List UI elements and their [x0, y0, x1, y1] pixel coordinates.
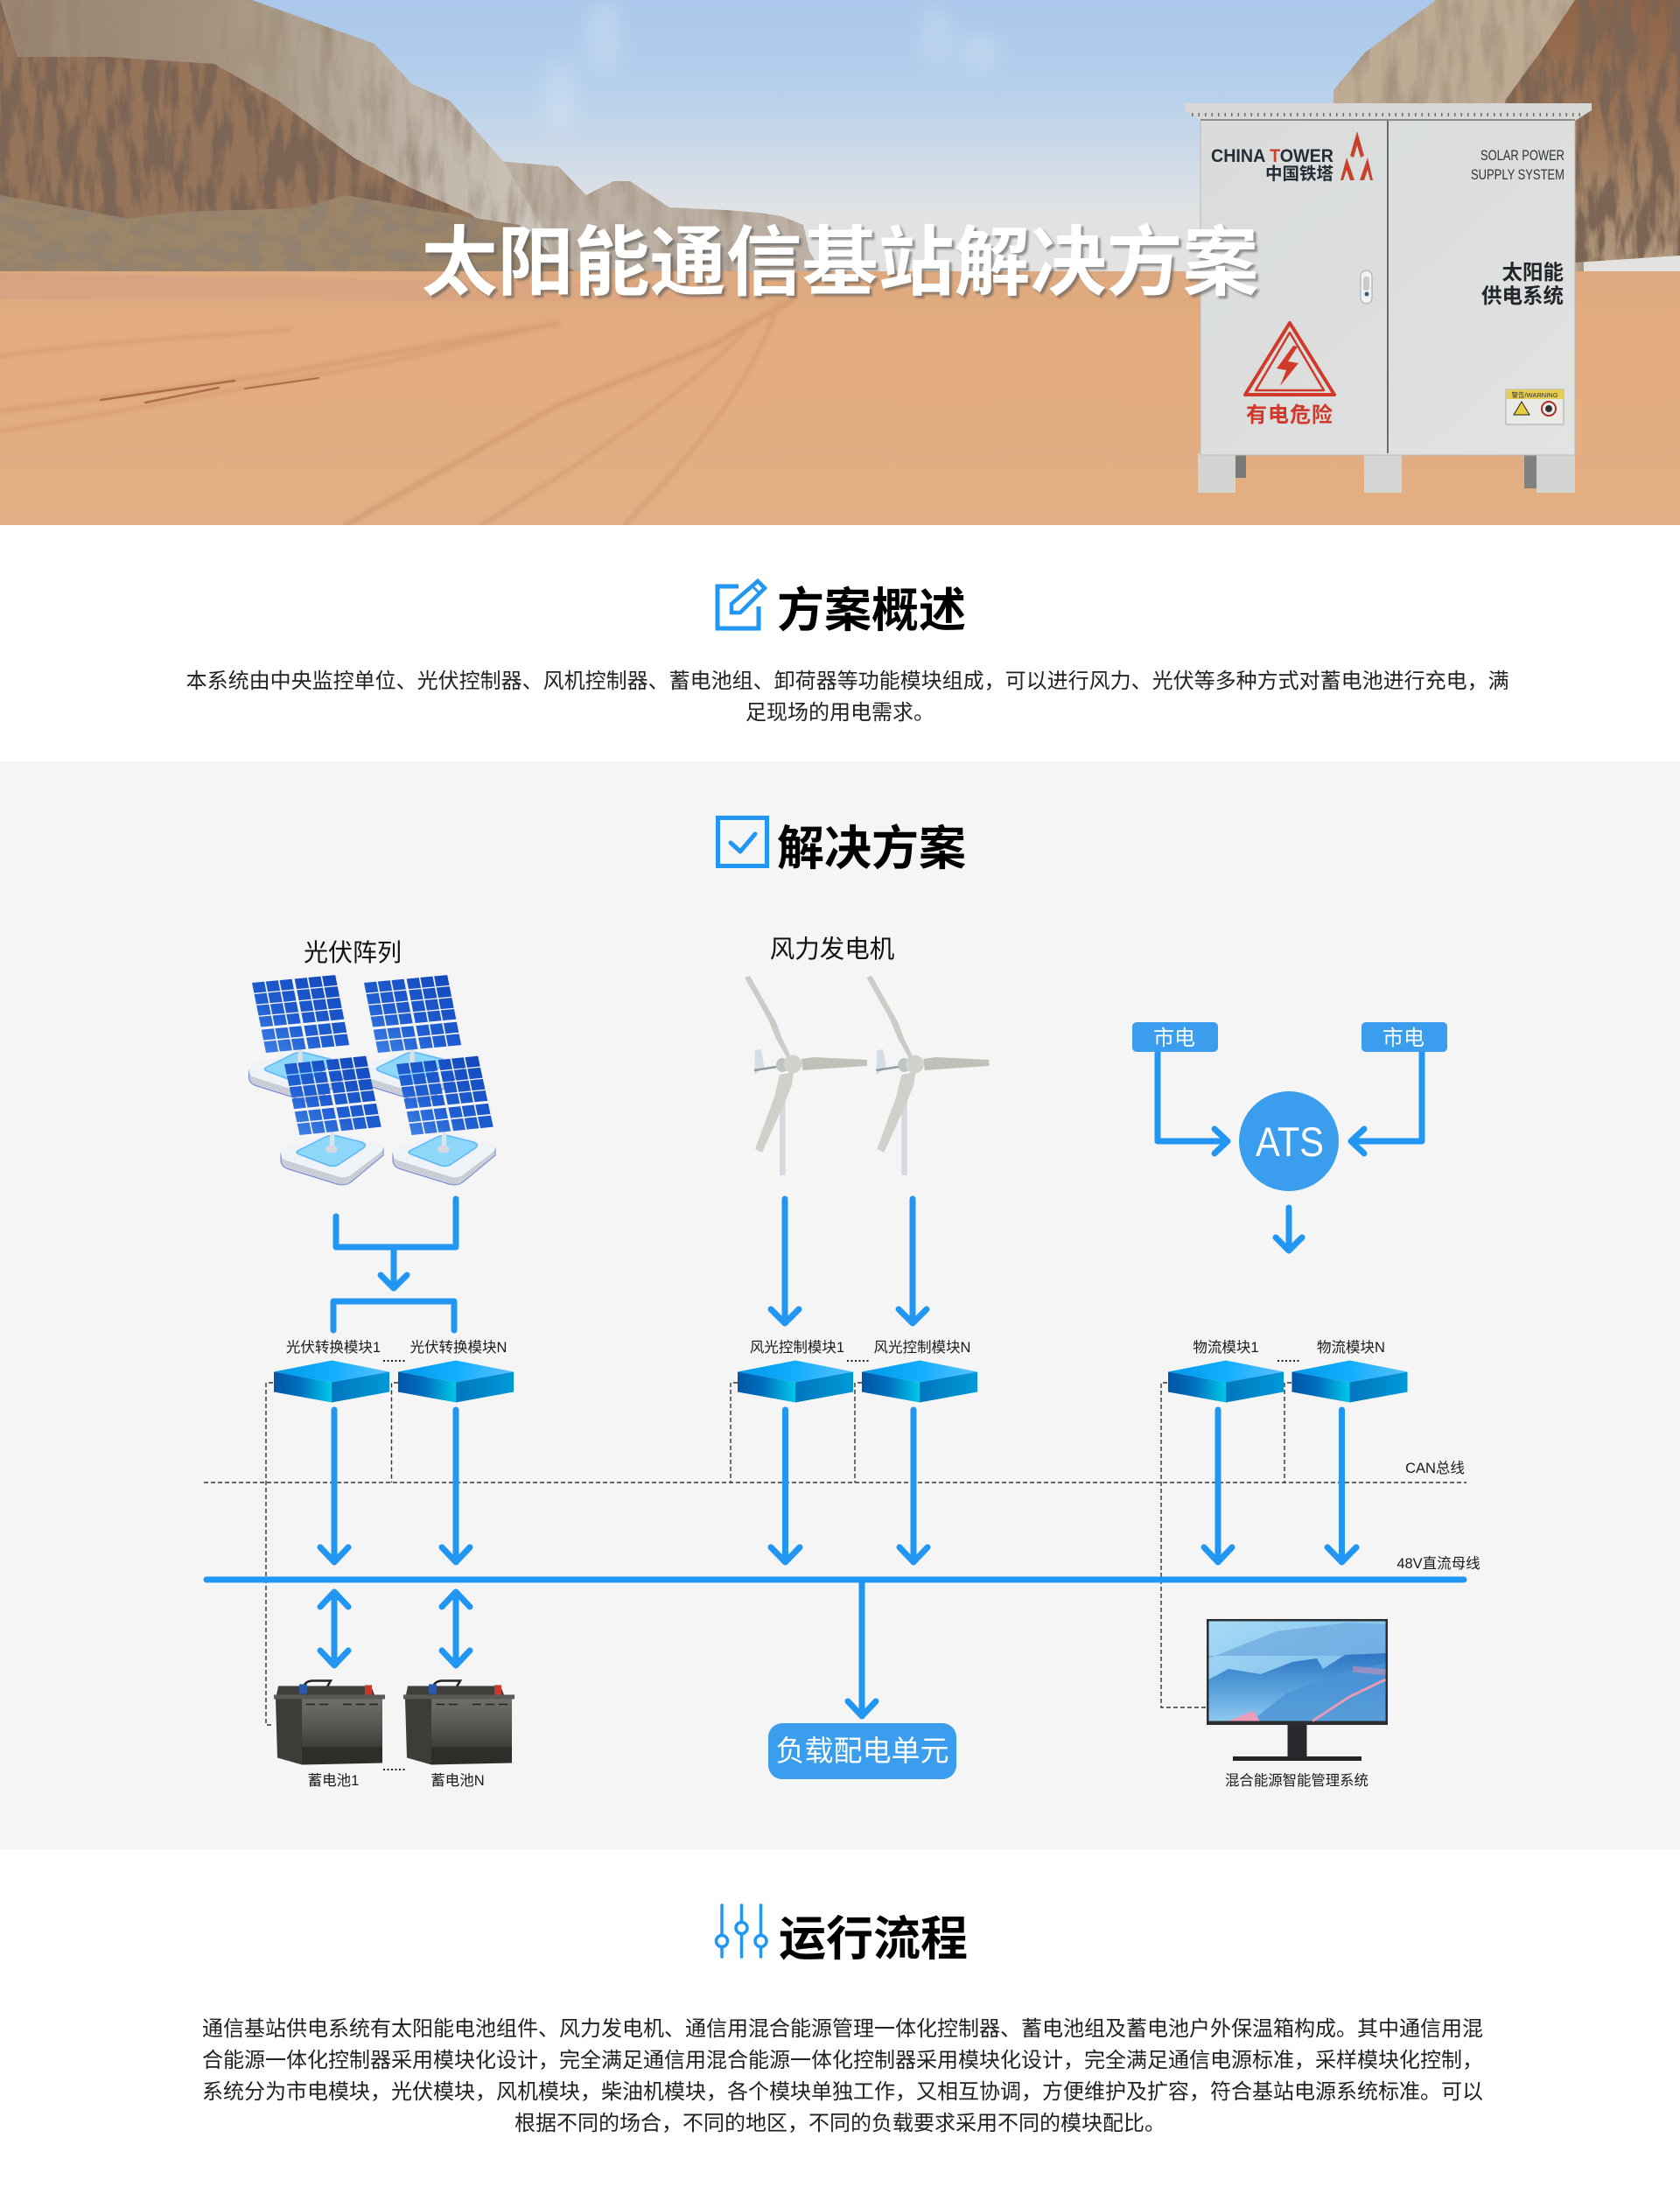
- overview paragraph: [186, 669, 1509, 725]
- ATS circle: ATS: [1256, 1118, 1324, 1165]
- monitor: [1207, 1619, 1388, 1761]
- cabinet feet: [1198, 453, 1575, 493]
- module labels: 光伏转换模块N: [410, 1339, 507, 1356]
- DC bus: [206, 1577, 1464, 1582]
- danger triangle: [1245, 323, 1334, 395]
- city power box right: 市电: [1382, 1027, 1424, 1050]
- monitor label: 混合能源智能管理系统: [1225, 1773, 1368, 1789]
- city power box left: 市电: [1153, 1027, 1195, 1050]
- sky: [0, 0, 1680, 289]
- process paragraph: 通信基站供电系统有太阳能电池组件、风力发电机、通信用混合能源管理一体化控制器、蓄电池组及蓄电池户外保温箱构成。其中通信用混: [202, 2017, 1483, 2041]
- heading: overview: [716, 578, 966, 637]
- solar panels group: [248, 975, 495, 1185]
- left cliff dark strata: [0, 0, 525, 263]
- arrow: pv merge bracket: [333, 1199, 456, 1330]
- city power box left: [1132, 1022, 1218, 1052]
- icon: sliders: [716, 1905, 766, 1957]
- clouds: [546, 0, 998, 131]
- solar power english: SOLAR POWER: [1480, 147, 1564, 164]
- overview paragraph: 本系统由中央监控单位、光伏控制器、风机控制器、蓄电池组、卸荷器等功能模块组成，可以进行风力、光伏等多种方式对蓄电池进行充电，满: [186, 669, 1509, 693]
- CAN bus dashed lines: [204, 1383, 1466, 1725]
- module labels: [286, 1339, 1385, 1356]
- cabinet body: [1200, 119, 1575, 455]
- module labels: 物流模块N: [1317, 1339, 1385, 1356]
- hero banner: [0, 0, 1680, 525]
- danger text: 有电危险: [1246, 403, 1334, 427]
- door handle: [1361, 270, 1372, 304]
- distant peaks: [499, 161, 831, 289]
- cabinet roof: [1185, 103, 1592, 121]
- arrows: modules to bus: [320, 1410, 1356, 1562]
- cabinet text system: 供电系统: [1481, 284, 1564, 307]
- right tan cliff: [1334, 0, 1584, 280]
- dots between modules: [383, 1361, 1299, 1770]
- ATS circle: [1239, 1091, 1339, 1191]
- DC bus label: 48V直流母线: [1396, 1555, 1480, 1572]
- load distribution unit: 负载配电单元: [775, 1735, 948, 1767]
- process paragraph: [202, 2017, 1483, 2135]
- module labels: 风光控制模块1: [750, 1339, 844, 1356]
- module cubes: [274, 1360, 1407, 1402]
- cabinet text solar: 太阳能: [1502, 261, 1564, 284]
- battery label 1: 蓄电池1: [308, 1772, 359, 1789]
- warning label: 警告/WARNING: [1511, 390, 1558, 399]
- heading text: 方案概述: [777, 585, 966, 637]
- panel: solution section background: [0, 761, 1680, 1849]
- rear solar bases: [248, 1048, 464, 1102]
- right dark cliff: [1505, 0, 1680, 280]
- logo text CHINA TOWER: CHINA TOWER: [1211, 145, 1334, 166]
- module labels: 物流模块1: [1193, 1339, 1259, 1356]
- wind turbines: [745, 976, 989, 1175]
- arrows: city power to ATS: [1158, 1050, 1422, 1251]
- left cliff wall: [0, 0, 560, 289]
- batteries: [274, 1680, 514, 1764]
- far sand strip: [0, 273, 840, 302]
- icon: checkbox: [718, 817, 766, 866]
- red tower logo: [1340, 131, 1373, 180]
- sand ground: [0, 271, 1680, 525]
- heading text: 解决方案: [777, 823, 966, 875]
- CAN bus label: CAN总线: [1405, 1460, 1465, 1476]
- supply system english: SUPPLY SYSTEM: [1471, 166, 1564, 183]
- rear solar panels: [252, 975, 461, 1053]
- icon: edit: [718, 581, 765, 628]
- double arrows: bus to battery: [320, 1592, 470, 1665]
- hero title: 太阳能通信基站解决方案: [422, 221, 1258, 305]
- process paragraph: 根据不同的场合，不同的地区，不同的负载要求采用不同的模块配比。: [514, 2112, 1166, 2135]
- overview paragraph: 足现场的用电需求。: [746, 701, 934, 725]
- module labels: 风光控制模块N: [874, 1339, 970, 1356]
- arrow: bus to load: [848, 1580, 876, 1716]
- city power box right: [1362, 1022, 1447, 1052]
- wind label: 风力发电机: [770, 936, 894, 964]
- tyre tracks: [0, 300, 792, 525]
- door seam: [1387, 121, 1389, 453]
- outdoor cabinet: [1185, 103, 1592, 493]
- heading: process: [716, 1905, 968, 1966]
- battery label N: 蓄电池N: [430, 1772, 485, 1789]
- left foreground talus: [0, 195, 595, 283]
- process paragraph: 合能源一体化控制器采用模块化设计，完全满足通信用混合能源一体化控制器采用模块化设计，完全满足通信电源标准，采样模块化控制，: [202, 2049, 1483, 2072]
- load distribution unit: [768, 1723, 956, 1779]
- heading: solution: [718, 817, 966, 875]
- dark track marks: [101, 378, 318, 403]
- arrows: wind down: [771, 1199, 927, 1323]
- front solar panels: [284, 1056, 494, 1135]
- process paragraph: 系统分为市电模块，光伏模块，风机模块，柴油机模块，各个模块单独工作，又相互协调，方便维护及扩容，符合基站电源系统标准。可以: [202, 2080, 1483, 2104]
- pv array label: 光伏阵列: [304, 939, 402, 966]
- warning label: [1506, 389, 1564, 424]
- city power boxes and ATS: [1132, 1022, 1447, 1251]
- heading text: 运行流程: [779, 1913, 968, 1966]
- module labels: 光伏转换模块1: [286, 1339, 381, 1356]
- front solar bases: [281, 1132, 495, 1185]
- logo text Chinese: 中国铁塔: [1265, 165, 1334, 184]
